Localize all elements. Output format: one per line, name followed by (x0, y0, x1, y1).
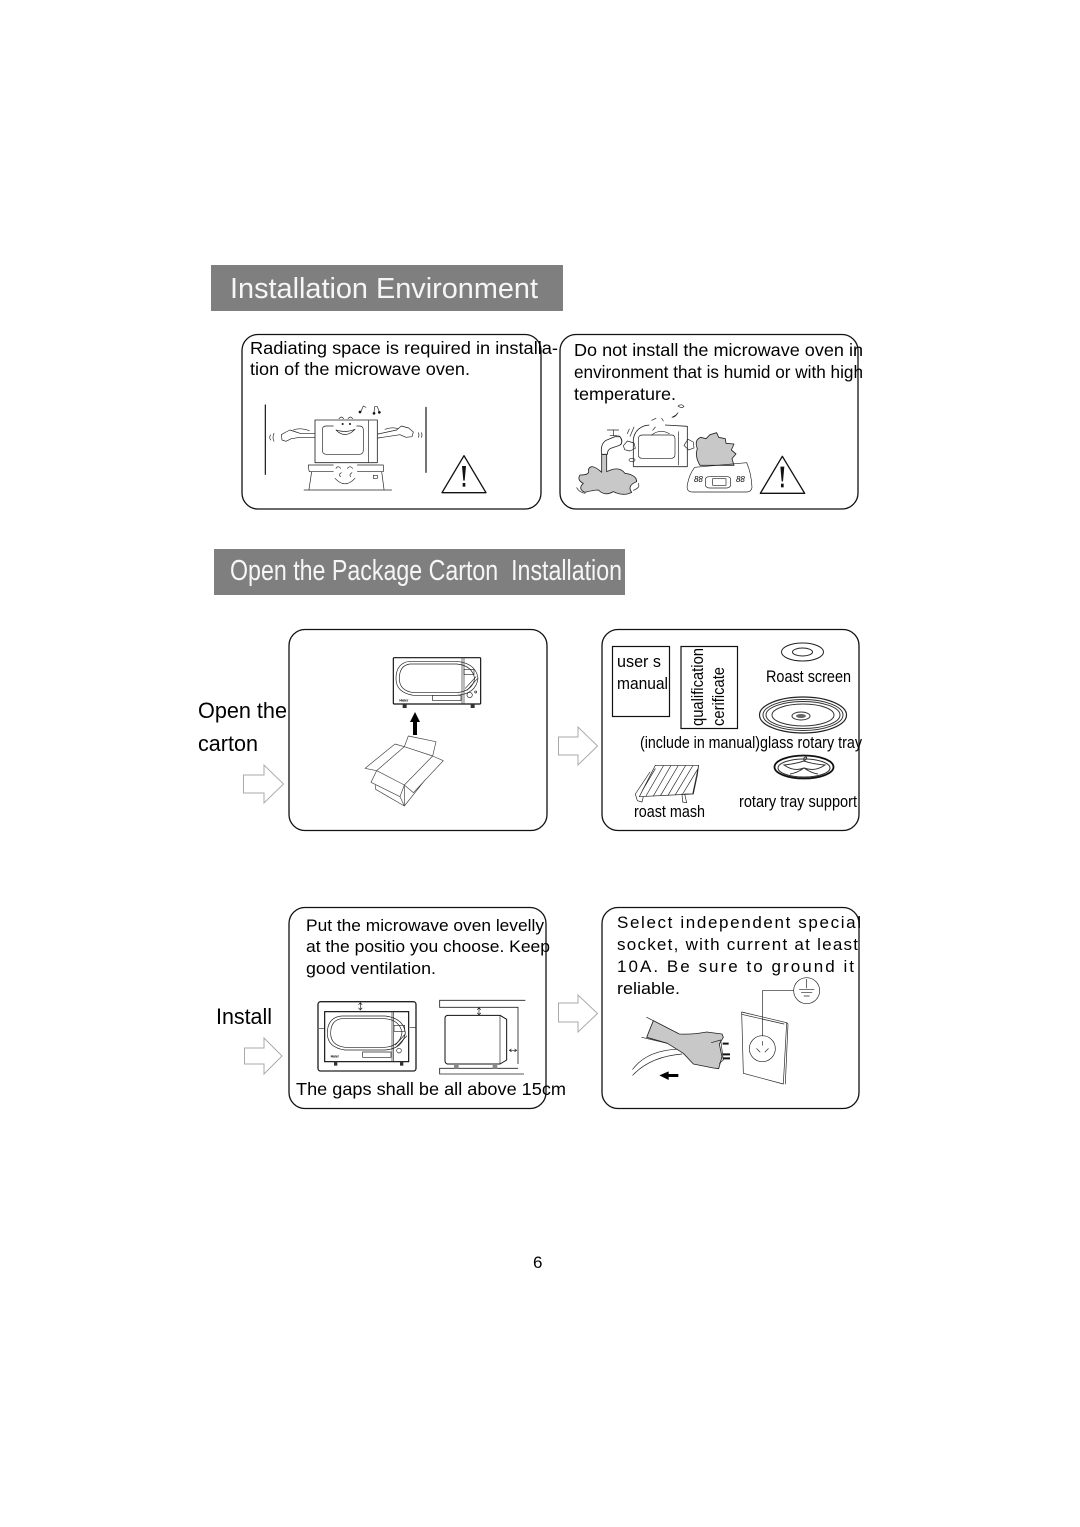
panel: placement and ventilation (289, 908, 566, 1108)
illustration: oven side with clearance (440, 1000, 525, 1074)
illustration: hand unplugging from grounded socket (633, 978, 820, 1084)
text: gaps note: The gaps shall be all above 15cm (296, 1079, 566, 1099)
panel: humidity and temperature (560, 334, 863, 509)
arrow: to install panel (244, 1038, 282, 1074)
text: radiating space instruction: Radiating space is required in installa- (250, 338, 558, 358)
item: qualification certificate: qualification (689, 648, 707, 726)
label: open the carton (198, 698, 287, 756)
item: user's manual: user s (617, 653, 661, 671)
illustration: open carton box (365, 736, 443, 806)
panel: radiating space (242, 334, 558, 509)
text: radiating space instruction: tion of the microwave oven. (250, 359, 470, 379)
note: include in manual: (include in manual) (640, 734, 760, 752)
item: qualification certificate (681, 646, 738, 728)
item: user's manual: manual (617, 675, 668, 693)
label: open the carton: carton (198, 731, 258, 756)
text: placement instruction: Put the microwave oven levelly (306, 917, 545, 935)
heading: Open the Package Carton Installation: Open the Package Carton Installation (230, 555, 622, 587)
label: open the carton: Open the (198, 698, 287, 723)
text: humidity warning: environment that is humid or with high (574, 362, 863, 382)
arrow: to socket panel (558, 995, 598, 1032)
text: humidity warning (574, 340, 863, 404)
text: humidity warning: temperature. (574, 384, 676, 404)
panel: unpack the microwave oven (289, 630, 547, 830)
text: humidity warning: Do not install the microwave oven in (574, 340, 863, 360)
item: qualification certificate: cerificate (710, 667, 728, 726)
text: placement instruction: at the positio you choose. Keep (306, 938, 550, 956)
illustration: microwave oven: Haier (399, 698, 409, 702)
text: placement instruction (306, 917, 550, 978)
arrow: to unpacking panel (244, 765, 284, 803)
heading: Open the Package Carton Installation (214, 549, 625, 595)
text: socket instruction (617, 913, 861, 998)
label: install: Install (216, 1004, 272, 1029)
item: roast screen (766, 643, 851, 686)
illustration: microwave oven (393, 658, 481, 708)
text: socket instruction: reliable. (617, 979, 680, 998)
item: rotary tray support: rotary tray support (739, 793, 857, 811)
illustration: oven front with clearance (318, 1002, 416, 1071)
heading: Installation Environment (211, 265, 563, 311)
illustration: happy microwave oven between walls (265, 405, 426, 490)
arrow: to accessories panel (558, 727, 598, 765)
illustration: oven front with clearance: Haier (331, 1054, 340, 1058)
icon: warning triangle (442, 456, 486, 493)
text: socket instruction: Select independent special (617, 913, 861, 932)
page number: 6 (533, 1253, 542, 1272)
illustration: oven with water puddle and flames (577, 405, 752, 494)
icon: warning triangle (760, 456, 805, 493)
item: roast screen: Roast screen (766, 668, 851, 686)
panel: socket and grounding (602, 908, 861, 1108)
text: socket instruction: 10A. Be sure to ground it (617, 957, 854, 976)
text: socket instruction: socket, with current at least (617, 935, 858, 954)
item: roast mash rack: roast mash (634, 803, 705, 821)
item: roast mash rack (634, 765, 705, 821)
arrow: lift out of carton (410, 712, 420, 735)
item: rotary tray support (739, 756, 857, 811)
item: glass rotary tray: glass rotary tray (760, 734, 863, 752)
heading: Installation Environment: Installation Environment (230, 273, 538, 305)
illustration: oven with water puddle and flames: 88 (736, 475, 745, 484)
text: radiating space instruction (250, 338, 558, 379)
item: glass rotary tray (760, 697, 863, 752)
item: user's manual (612, 646, 670, 716)
panel: accessories (602, 630, 863, 830)
text: placement instruction: good ventilation. (306, 960, 436, 978)
illustration: oven with water puddle and flames: 88 (694, 475, 703, 484)
